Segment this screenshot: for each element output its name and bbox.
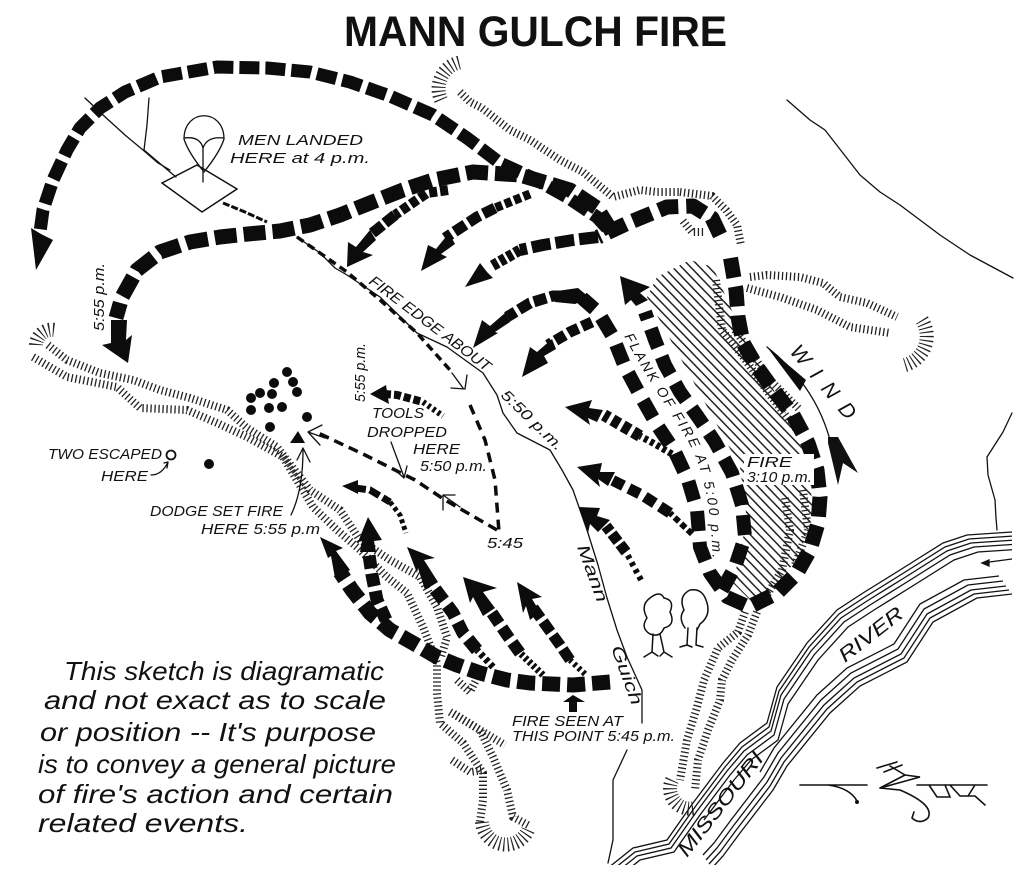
dashed arc with arrow near 5:55 <box>370 385 443 416</box>
ridge: north ridge from top fan to fire <box>439 62 741 245</box>
parachute icon and landing square <box>144 116 237 212</box>
arrow: branch from flank, north-west <box>522 322 592 377</box>
label: tools dropped: TOOLS <box>372 405 424 422</box>
arrow: wind <box>767 347 858 485</box>
explanatory note: related events. <box>38 808 248 838</box>
label: fire edge: FIRE EDGE ABOUT <box>366 273 496 376</box>
crew route: thin dashed lines <box>223 203 499 532</box>
label: men landed: MEN LANDED <box>238 132 363 149</box>
label: men landed <box>230 132 370 167</box>
river current arrow <box>982 559 1012 566</box>
icon: two escaped circle with pointer <box>151 450 176 475</box>
Dodge escape fire triangle <box>290 431 305 443</box>
fire line: loop around the fire front ending to the west <box>465 206 820 605</box>
arrow: base branch 5 <box>517 582 585 674</box>
fire line: flank middle path <box>620 276 745 590</box>
label: fire edge <box>366 273 567 454</box>
arrow: Dodge fire pointer <box>291 448 310 515</box>
arrow: east side spot 1 <box>565 400 672 454</box>
fire line: flank inner path with west arrow <box>473 288 745 605</box>
label: Dodge set fire: DODGE SET FIRE <box>150 503 284 520</box>
arrow: tools dropped pointer <box>391 442 407 478</box>
label: 5:45: 5:45 <box>487 535 524 552</box>
label: Mann Gulch: Guich <box>607 643 646 708</box>
label: men landed: HERE at 4 p.m. <box>230 150 370 167</box>
label: Mann Gulch <box>573 542 646 708</box>
explanatory note: and not exact as to scale <box>44 685 386 715</box>
label: 5:55 at west: 5:55 p.m. <box>91 263 108 331</box>
label: Dodge set fire: HERE 5:55 p.m <box>201 521 320 538</box>
explanatory note <box>38 656 396 838</box>
label: 5:55 near tools: 5:55 p.m. <box>352 343 369 402</box>
arrow: base branch 4 <box>463 577 543 675</box>
label: flank of fire: FLANK OF FIRE AT 5:00 p.m. <box>624 334 720 556</box>
title: MANN GULCH FIRE <box>344 8 727 56</box>
explanatory note: This sketch is diagramatic <box>64 656 384 686</box>
trees <box>644 590 708 657</box>
stream: upper left tributaries <box>85 98 170 170</box>
label: fire seen <box>512 713 675 745</box>
label: fire edge: 5:50 p.m. <box>497 387 567 454</box>
label: Missouri: MISSOURI <box>674 748 769 861</box>
arrow: fire seen pointer <box>563 695 585 712</box>
arrow: base branch 2 <box>358 517 386 620</box>
label: two escaped: HERE <box>101 468 149 485</box>
label: Dodge set fire <box>150 503 320 538</box>
fire area hatching <box>647 260 813 607</box>
fire line: base from first seen point to north-west <box>320 537 610 685</box>
river labels <box>674 603 908 861</box>
tree 2 <box>680 590 708 647</box>
tree 1 <box>644 594 672 657</box>
ridge inside the fire <box>716 280 808 595</box>
victims: black dots <box>204 367 312 469</box>
label: fire seen: FIRE SEEN AT <box>512 713 625 730</box>
ridge: east ridge with fan <box>747 275 927 365</box>
explanatory note: of fire's action and certain <box>38 779 393 809</box>
label: fire seen: THIS POINT 5:45 p.m. <box>512 728 675 745</box>
river upper bank lines <box>608 532 1023 880</box>
ridge lines <box>33 62 927 845</box>
arrow: sweep branch to fire edge 1 <box>347 190 448 267</box>
label: tools dropped: 5:50 p.m. <box>420 458 487 475</box>
ridge: west ridge down through the gulch <box>33 330 528 845</box>
ridge: south ridge towards the river <box>670 612 757 809</box>
stream: upper right line <box>787 100 1013 278</box>
dashed arc with arrow near Dodge fire <box>342 480 406 533</box>
label: Mann Gulch: Mann <box>573 542 612 605</box>
arrow: base branch 3 <box>407 547 493 667</box>
big dashed fire line: outer arc from ridge to top left <box>31 67 607 270</box>
label: wind: WIND <box>785 340 861 424</box>
label: fire time: FIRE <box>747 454 793 471</box>
explanatory note: is to convey a general picture <box>38 749 396 779</box>
streams <box>85 98 1013 863</box>
label: fire time: 3:10 p.m. <box>747 469 812 486</box>
Missouri River <box>608 532 1023 880</box>
river lower bank lines <box>703 576 1012 868</box>
arrow: sweep branch to fire edge 2 <box>421 194 530 271</box>
arrow: east side spot 2 <box>577 463 692 534</box>
label: tools dropped: DROPPED <box>367 424 447 441</box>
big dashed fire line: second sweep to west ridge <box>102 172 612 363</box>
stream: Mann Gulch <box>297 237 642 863</box>
label: fire time <box>744 454 814 486</box>
stream: right tributary <box>987 413 1012 530</box>
compass and north sign <box>800 762 987 822</box>
label: two escaped: TWO ESCAPED <box>48 446 162 463</box>
label: tools dropped <box>367 405 487 475</box>
label: tools dropped: HERE <box>413 441 461 458</box>
arrow: east side spot 3 <box>579 507 641 580</box>
label: two escaped <box>48 446 162 485</box>
label: River: RIVER <box>835 603 908 667</box>
explanatory note: or position -- It's purpose <box>40 717 376 747</box>
